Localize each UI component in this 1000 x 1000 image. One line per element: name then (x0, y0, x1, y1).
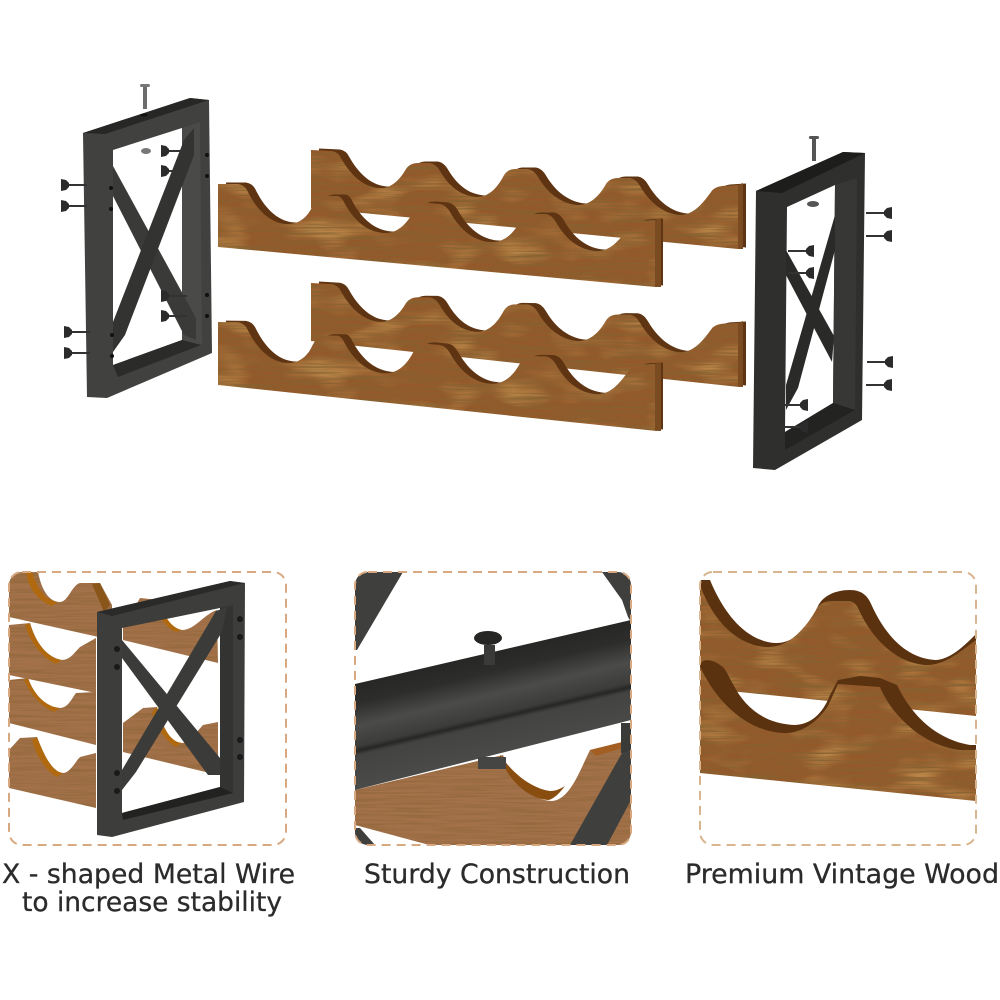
lower wood boards (218, 281, 746, 431)
wood under beam (355, 740, 631, 846)
dashed border (700, 572, 976, 845)
rear board (700, 580, 976, 716)
left metal frame (83, 98, 212, 398)
exploded view: wine rack parts (61, 84, 893, 470)
frame close-up (97, 581, 245, 837)
caption: metal wire: X - shaped Metal Wire (2, 859, 295, 890)
front board (700, 660, 976, 801)
caption: metal wire: to increase stability (22, 887, 282, 918)
bolt and nut (474, 631, 506, 769)
caption: sturdy construction: Sturdy Construction (364, 859, 630, 890)
caption: metal wire (2, 859, 295, 918)
left frame screws (61, 84, 187, 359)
metal beam (355, 620, 631, 790)
panel: vintage wood close-up (700, 572, 976, 845)
panel: metal frame close-up (9, 572, 286, 845)
boards behind frame (9, 572, 218, 808)
panel: sturdy construction close-up (355, 572, 631, 846)
dashed border (355, 572, 631, 845)
right frame screws (782, 136, 893, 433)
dashed border (9, 572, 286, 845)
caption: vintage wood: Premium Vintage Wood (685, 859, 999, 890)
metal struts (355, 572, 631, 845)
upper wood boards (218, 148, 746, 287)
right metal frame (753, 152, 865, 470)
